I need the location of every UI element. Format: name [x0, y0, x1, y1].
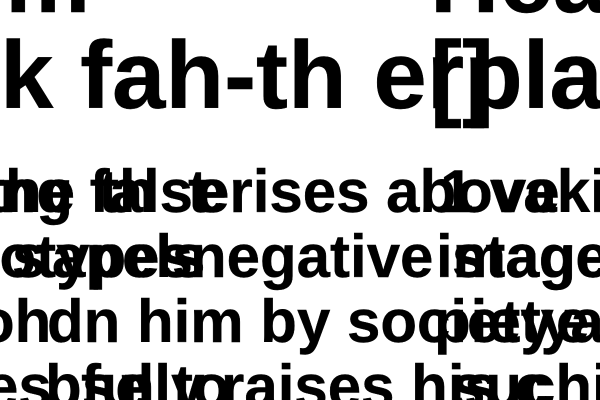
body text: right layer: e: [556, 288, 589, 355]
body text: right layer: [434, 158, 600, 400]
body text: middle layer: dn him by society a: [47, 288, 600, 355]
body text: middle layer: t: [188, 158, 208, 225]
heading: second line: []: [430, 22, 494, 129]
body text: middle layer: [0, 158, 600, 400]
body text: left layer: s: [12, 223, 45, 290]
body text: middle layer: th: [99, 158, 156, 225]
heading: clipped top line: [5, 0, 600, 33]
body text: middle layer: erises above: [196, 158, 560, 225]
body text: middle layer: negative: [190, 223, 433, 290]
heading: second line: k fah-th erpla: [0, 22, 600, 129]
body text: right layer: piety: [434, 288, 575, 355]
body text: left layer: [0, 158, 230, 400]
body text: left layer: apels: [52, 223, 205, 290]
